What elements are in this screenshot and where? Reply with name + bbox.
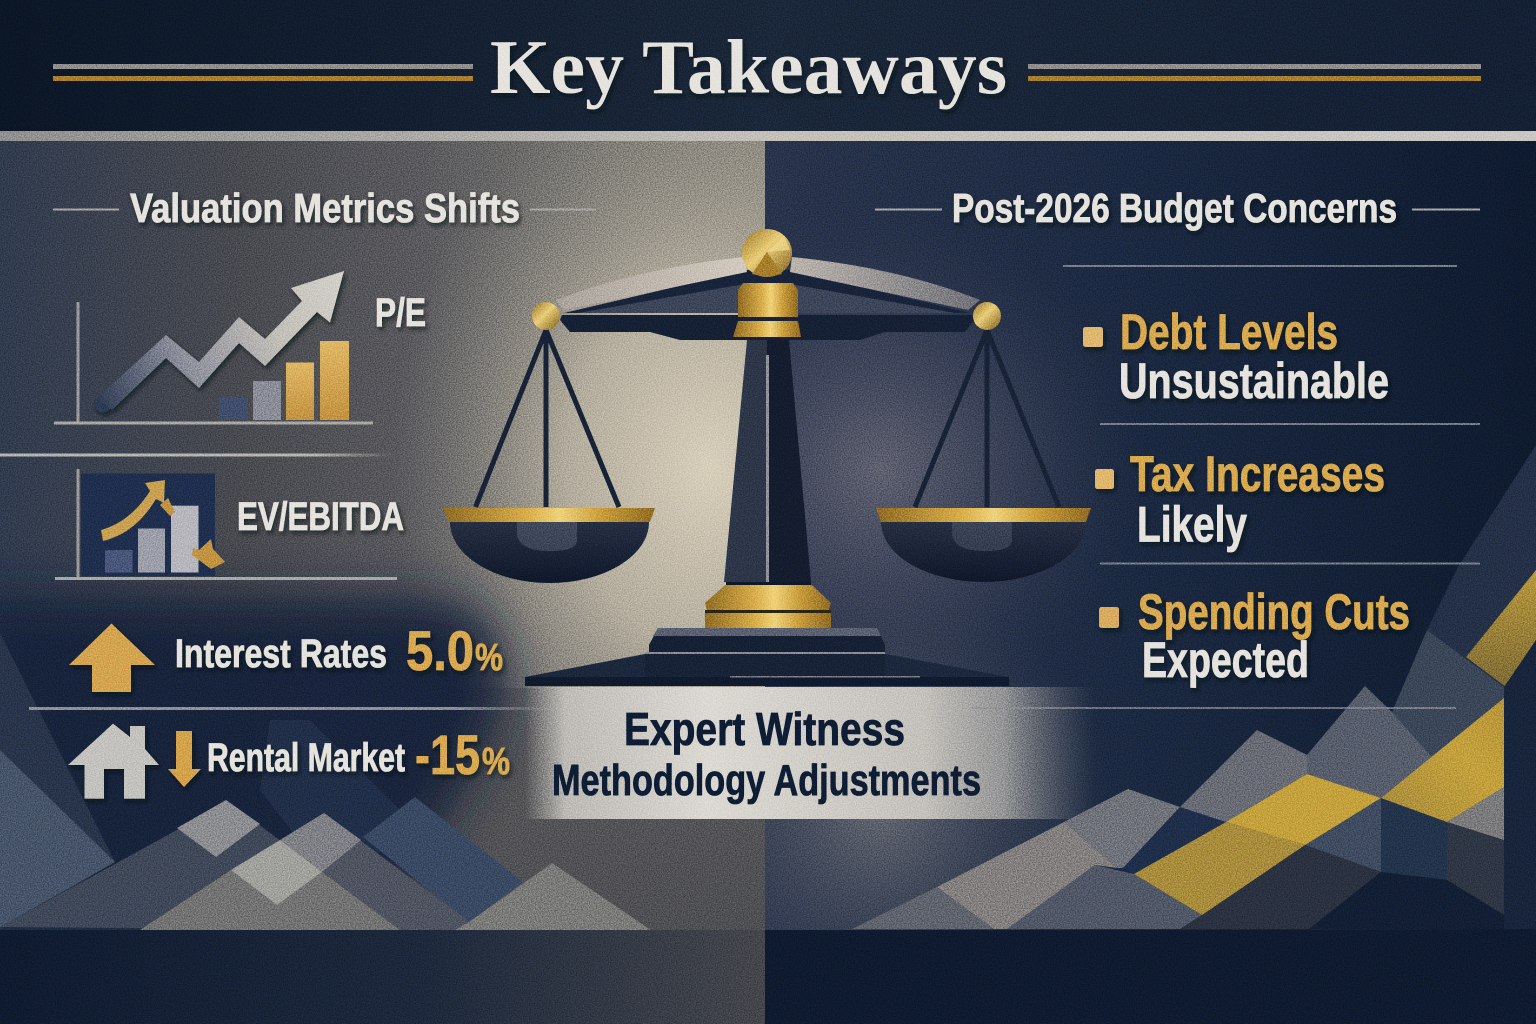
list item: spending cuts expected: Spending Cuts [1138,584,1410,640]
icon: house [68,724,159,799]
divider: header rule [0,131,1536,141]
bullet [1099,607,1119,628]
divider: budget item two [1100,562,1480,564]
label: EV/EBITDA: EV/EBITDA [237,495,404,539]
scale collar [733,283,801,337]
text: methodology adjustments: Methodology Adjustments [552,756,981,805]
scale strings left [476,330,619,507]
label: rental market: Rental Market [207,736,405,780]
value: rental market -15%: -15 [415,723,480,786]
icon: rising zigzag arrow [94,271,344,412]
divider: banner right [972,707,1456,709]
scale top finial [742,229,792,277]
scale left knob [532,302,560,330]
list item: debt levels unsustainable: Unsustainable [1119,353,1389,409]
scale column [724,340,811,587]
scale right pan [876,508,1091,582]
chart: P/E rising arrow and bars [54,271,373,424]
scale beam [556,257,980,340]
label: P/E: P/E [375,291,426,335]
bar chart: P/E bars [219,341,349,420]
bullet [1083,327,1103,347]
bullet [1095,469,1114,489]
title: Key Takeaways [490,24,1007,110]
list item: tax increases likely: Tax Increases [1130,446,1385,502]
icon: curved up arrow [101,480,165,541]
list item: spending cuts expected: Expected [1142,632,1309,688]
panel: right budget background [765,140,1536,932]
panel: left geometric mountains [0,633,651,930]
panel: right geometric mountains [852,445,1536,929]
divider: lower left [29,707,559,710]
divider: budget top [1063,265,1457,267]
list item: tax increases likely [1095,446,1385,552]
scale strings right [915,330,1059,507]
panel: header background [0,0,1536,131]
list item: tax increases likely: Likely [1137,496,1247,552]
panel: left dark lower zone [0,597,507,940]
value: rental market -15%: % [482,741,510,783]
text: expert witness: Expert Witness [624,703,905,755]
panel: left valuation background [0,140,766,932]
divider: left metrics [0,454,395,456]
list item: debt levels unsustainable [1083,304,1389,409]
list item: spending cuts expected [1099,584,1410,688]
heading: post-2026 budget concerns: Post-2026 Budget Concerns [952,185,1397,231]
icon: down arrow [160,498,225,569]
scale right knob [973,302,1001,330]
panel: expert witness banner [525,687,1095,819]
scale gold foot [705,585,831,628]
panel: bottom band [0,930,1536,1024]
icon: rental market down arrow [168,731,201,787]
chart: EV/EBITDA mixed bars [55,469,397,580]
heading: valuation metrics shifts: Valuation Metrics Shifts [130,185,520,231]
title [53,24,1481,110]
scale left pan [443,508,655,583]
divider: budget item one [1100,423,1480,425]
icon: interest rates up arrow [69,624,155,692]
icon: balance scale [443,229,1091,686]
list item: debt levels unsustainable: Debt Levels [1120,304,1338,360]
bar chart: EV/EBITDA bars [105,506,198,572]
value: interest rate 5.0%: % [475,637,503,679]
scale base [525,628,1009,686]
label: interest rates: Interest Rates [175,632,387,676]
value: interest rate 5.0%: 5.0 [406,619,474,682]
